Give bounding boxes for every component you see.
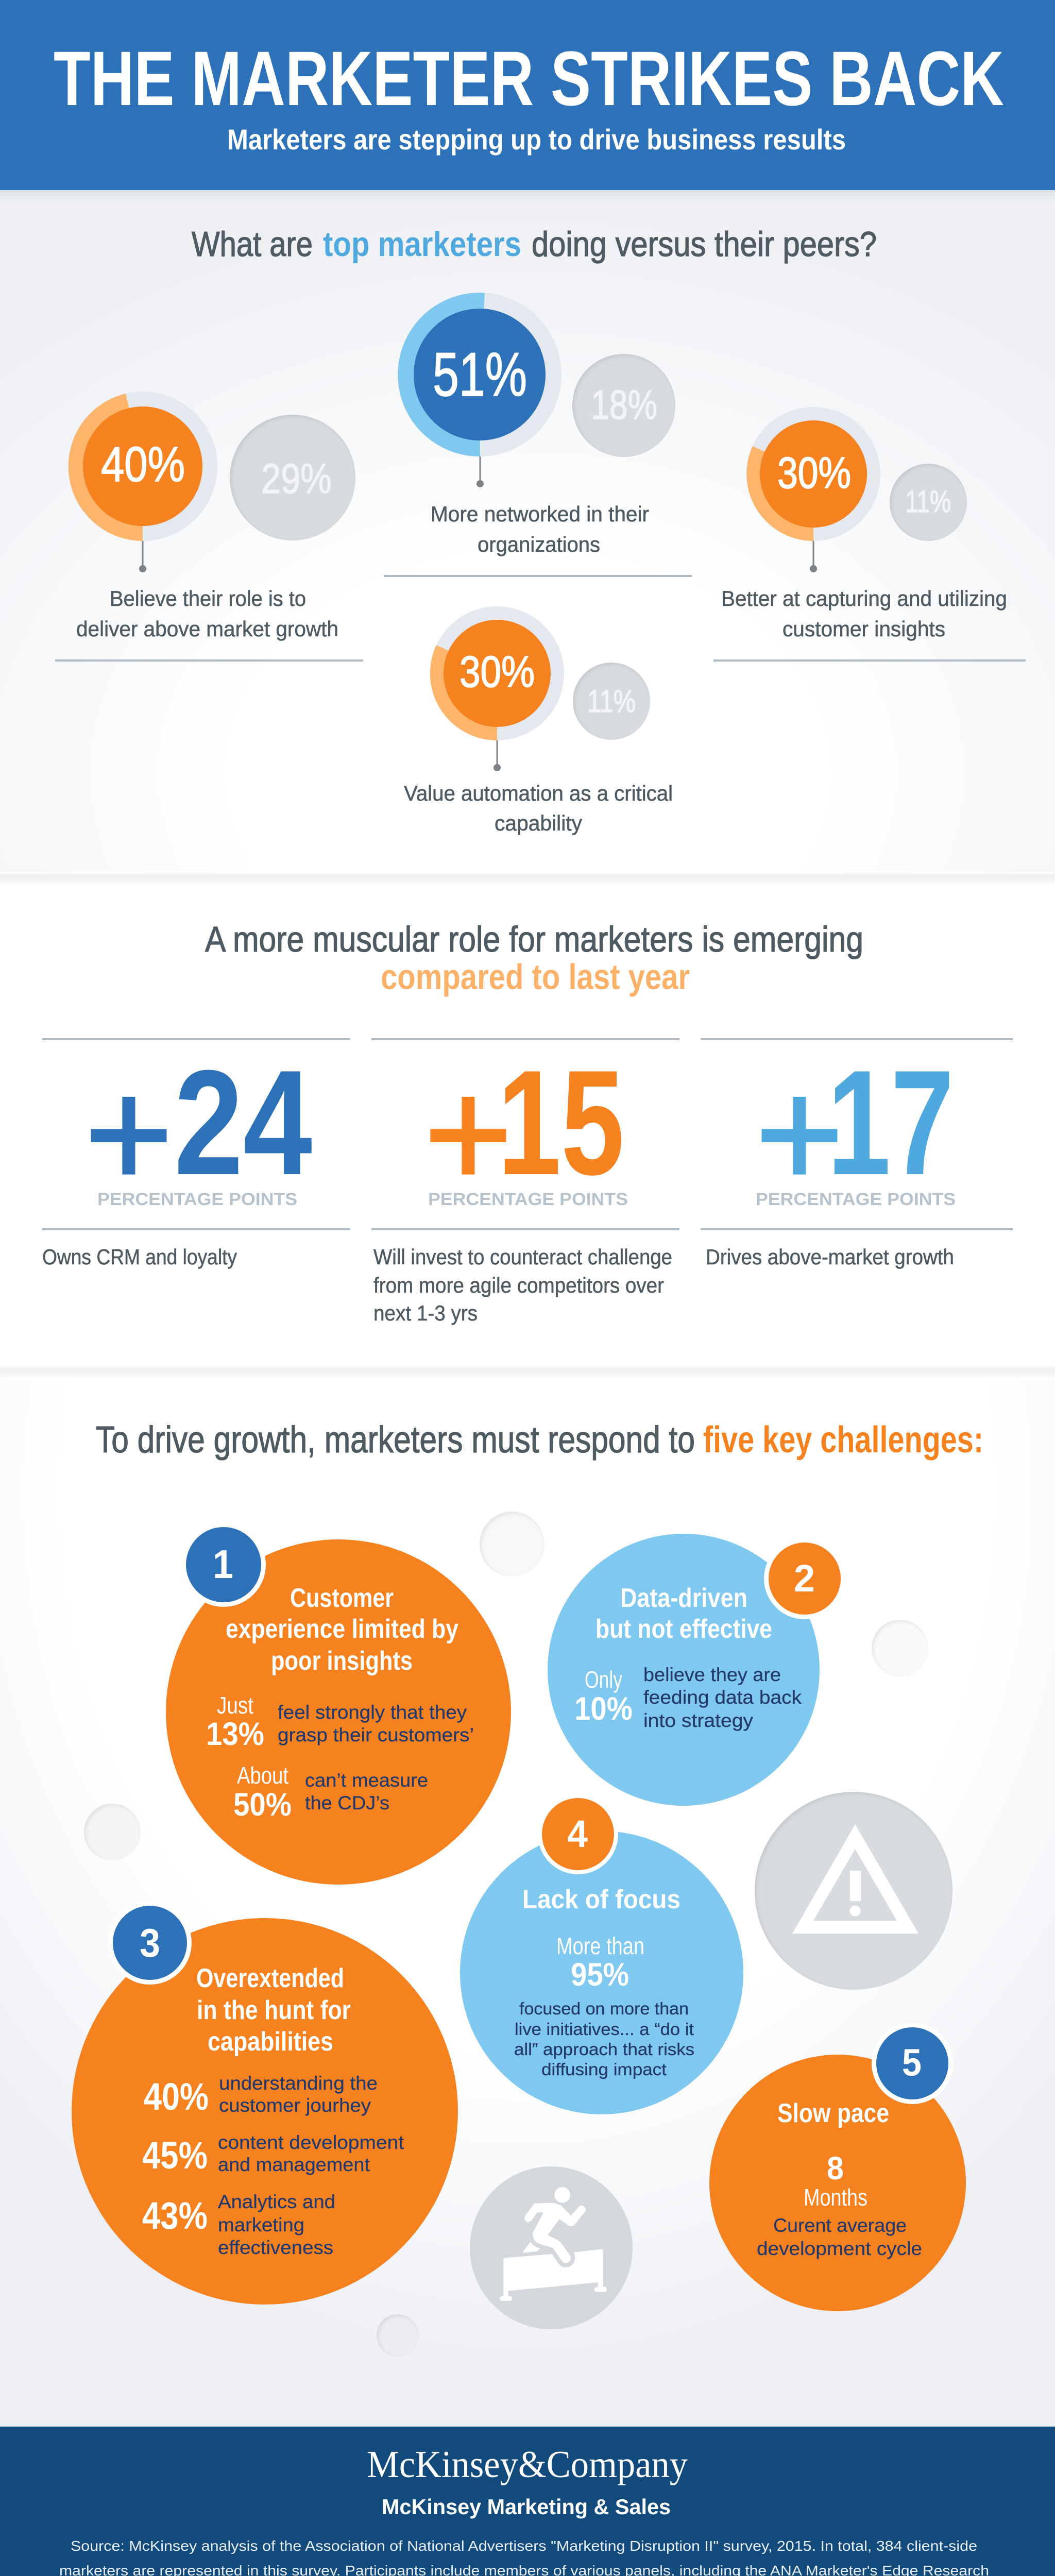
stat 45%: and management xyxy=(218,2154,370,2175)
stat 8 months: development cycle xyxy=(757,2238,922,2259)
bubble title: Lack of focus xyxy=(522,1885,680,1914)
stat: plus 17: PERCENTAGE POINTS xyxy=(756,1190,956,1209)
top marketers donut 40% xyxy=(68,392,217,541)
stat 95%: live initiatives... a “do it xyxy=(515,2020,694,2039)
challenge 3: overextended xyxy=(72,1901,458,2304)
stat 95%: all” approach that risks xyxy=(514,2040,694,2059)
stat 13%: feel strongly that they xyxy=(278,1702,467,1723)
stat 45%: content development xyxy=(218,2132,404,2153)
label: customer insights xyxy=(782,617,945,641)
peers circle 11%: 11% xyxy=(587,684,636,719)
top marketers donut 30%: 30% xyxy=(460,648,535,697)
label: capability xyxy=(495,811,582,835)
challenge 5: slow pace xyxy=(709,2023,966,2311)
bubble title xyxy=(595,1583,772,1644)
top marketers donut 30% xyxy=(430,606,564,740)
stat: plus 15: PERCENTAGE POINTS xyxy=(428,1190,628,1209)
stat 50%: the CDJ’s xyxy=(305,1792,389,1814)
stat: plus 15 xyxy=(373,1039,672,1325)
big number: + xyxy=(755,1047,844,1220)
stat 40%: understanding the xyxy=(219,2073,378,2094)
peers circle 18%: 18% xyxy=(591,382,657,428)
stat: plus 15: next 1-3 yrs xyxy=(373,1301,478,1325)
stat 43% xyxy=(142,2191,335,2258)
connector xyxy=(477,456,484,487)
stat: plus 24: PERCENTAGE POINTS xyxy=(97,1190,297,1209)
stat: plus 24: Owns CRM and loyalty xyxy=(42,1245,237,1269)
stat 43%: effectiveness xyxy=(218,2237,333,2258)
stat 10%: feeding data back xyxy=(643,1687,802,1708)
stat: plus 17 xyxy=(706,1039,956,1269)
top marketers donut 30% xyxy=(746,407,880,541)
big number: 24 xyxy=(174,1039,313,1206)
top marketers donut 40%: 40% xyxy=(101,437,185,492)
panel: five key challenges xyxy=(0,1365,1055,2427)
big number: + xyxy=(424,1047,513,1220)
number badge xyxy=(538,1794,618,1874)
icon: hurdler xyxy=(470,2166,633,2329)
label: Better at capturing and utilizing xyxy=(721,586,1007,611)
number badge xyxy=(872,2023,953,2104)
panel: footer xyxy=(0,2427,1055,2576)
connector xyxy=(139,541,146,572)
bubble title xyxy=(226,1583,458,1676)
stat 10% xyxy=(574,1664,802,1731)
section heading xyxy=(192,225,877,264)
stat 13%: 13% xyxy=(206,1716,264,1752)
label: organizations xyxy=(478,532,600,556)
label xyxy=(431,502,649,556)
stat 13% xyxy=(206,1692,474,1752)
stat 95%: diffusing impact xyxy=(541,2060,667,2079)
section heading: five key challenges: xyxy=(703,1419,983,1461)
source note xyxy=(59,2538,989,2576)
bubble xyxy=(548,1534,820,1806)
panel: muscular role xyxy=(0,872,1055,1365)
bubble title: Overextended xyxy=(196,1963,344,1993)
panel: header xyxy=(0,0,1055,190)
challenge 4: lack of focus xyxy=(460,1794,743,2114)
stat 45% xyxy=(142,2132,404,2177)
number badge: 2 xyxy=(794,1557,815,1600)
peers circle 18% xyxy=(572,354,675,457)
bubble title: capabilities xyxy=(208,2027,333,2057)
big number xyxy=(424,1039,624,1220)
number badge xyxy=(108,1901,192,1985)
logo wordmark: McKinsey&Company xyxy=(367,2444,688,2486)
stat 43%: 43% xyxy=(142,2194,208,2237)
label: More networked in their xyxy=(431,502,649,526)
section background xyxy=(0,1365,1055,2427)
stat 95%: focused on more than xyxy=(519,1999,689,2018)
challenge 1: customer experience xyxy=(166,1522,511,1885)
bubble xyxy=(166,1539,511,1885)
stat 40%: 40% xyxy=(144,2075,209,2118)
bubble title: poor insights xyxy=(271,1646,413,1676)
peers circle 29% xyxy=(230,415,355,540)
bubble title: Customer xyxy=(290,1583,394,1613)
section heading xyxy=(205,919,863,997)
number badge: 1 xyxy=(213,1541,233,1587)
peers circle 11% xyxy=(890,464,967,541)
bubble title: Data-driven xyxy=(620,1583,747,1613)
connector xyxy=(494,740,501,771)
number badge: 4 xyxy=(567,1812,588,1855)
peers circle 11%: 11% xyxy=(905,484,951,519)
subtitle: Marketers are stepping up to drive business results xyxy=(227,123,846,156)
stat 13%: Just xyxy=(217,1692,253,1719)
stat 10%: Only xyxy=(585,1666,622,1693)
connector xyxy=(810,541,817,572)
bubble title: Slow pace xyxy=(777,2098,889,2128)
bubble xyxy=(460,1831,743,2114)
bubble xyxy=(709,2055,966,2311)
header background xyxy=(0,0,1055,190)
stat 8 months: Curent average xyxy=(773,2215,907,2236)
number badge: 5 xyxy=(902,2041,922,2084)
big number: 17 xyxy=(827,1039,954,1206)
stat 43%: marketing xyxy=(218,2214,304,2235)
number badge: 3 xyxy=(140,1920,160,1965)
stat 8 months: 8 xyxy=(827,2150,844,2187)
stat 13%: grasp their customers’ xyxy=(278,1724,474,1745)
footer background xyxy=(0,2427,1055,2576)
stat 8 months: Months xyxy=(804,2184,867,2211)
bubble title xyxy=(196,1963,351,2057)
bubble title: in the hunt for xyxy=(197,1995,351,2025)
number badge xyxy=(764,1538,845,1619)
stat 40% xyxy=(144,2073,378,2118)
label xyxy=(721,586,1007,641)
label xyxy=(404,781,673,835)
big number xyxy=(755,1039,954,1220)
stat 50%: About xyxy=(237,1762,288,1789)
stat 95%: 95% xyxy=(571,1957,629,1993)
panel: top marketers versus peers xyxy=(0,190,1055,872)
icon: warning xyxy=(755,1792,952,1990)
stat 8 months xyxy=(757,2150,922,2259)
section heading: What are xyxy=(192,225,313,264)
section heading: A more muscular role for marketers is emerging xyxy=(205,919,863,959)
stat: 30 percent value automation xyxy=(404,606,673,835)
stat 95%: More than xyxy=(556,1933,644,1959)
challenge 2: data-driven xyxy=(548,1534,845,1806)
section background xyxy=(0,190,1055,872)
stat: plus 15: Will invest to counteract challenge xyxy=(373,1245,672,1269)
label: deliver above market growth xyxy=(76,617,338,641)
stat: 51 percent more networked xyxy=(398,293,675,556)
stat 10%: into strategy xyxy=(643,1710,754,1731)
label xyxy=(76,586,338,641)
bubble title: experience limited by xyxy=(226,1614,458,1644)
section heading: top marketers xyxy=(323,225,521,264)
section heading: doing versus their peers? xyxy=(532,225,877,264)
top marketers donut 51% xyxy=(398,293,561,456)
stat 40%: customer jourhey xyxy=(219,2095,371,2116)
stat 10%: 10% xyxy=(574,1691,633,1727)
stat: 30 percent customer insights xyxy=(721,407,1007,641)
stat: plus 15: from more agile competitors over xyxy=(373,1273,664,1297)
stat 50%: 50% xyxy=(233,1787,292,1823)
stat: 40 percent above market growth xyxy=(68,392,355,641)
top marketers donut 51%: 51% xyxy=(433,340,527,409)
label: Believe their role is to xyxy=(110,586,306,611)
top marketers donut 30%: 30% xyxy=(777,449,851,498)
section background xyxy=(0,872,1055,1365)
bubble title: but not effective xyxy=(595,1614,772,1644)
stat 50%: can’t measure xyxy=(305,1770,428,1791)
stat 43%: Analytics and xyxy=(218,2191,335,2212)
stat 45%: 45% xyxy=(142,2134,208,2177)
section heading: To drive growth, marketers must respond to xyxy=(96,1419,695,1461)
peers circle 29%: 29% xyxy=(261,455,332,502)
label: Value automation as a critical xyxy=(404,781,673,805)
source note: Source: McKinsey analysis of the Association of National Advertisers "Marketing Disruption II" survey, 2015. In total, 384 client-side xyxy=(71,2538,977,2554)
big number: 15 xyxy=(498,1039,624,1206)
big number xyxy=(84,1039,313,1220)
stat: plus 17: Drives above-market growth xyxy=(706,1245,954,1269)
bubble xyxy=(72,1918,458,2304)
stat 95% xyxy=(514,1933,694,2079)
practice name: McKinsey Marketing & Sales xyxy=(382,2495,671,2519)
stat: plus 24 xyxy=(42,1039,313,1269)
stat 10%: believe they are xyxy=(643,1664,781,1685)
peers circle 11% xyxy=(573,663,650,740)
big number: + xyxy=(84,1047,173,1220)
section heading: compared to last year xyxy=(381,957,690,997)
stat 50% xyxy=(233,1762,428,1823)
number badge xyxy=(181,1522,266,1607)
